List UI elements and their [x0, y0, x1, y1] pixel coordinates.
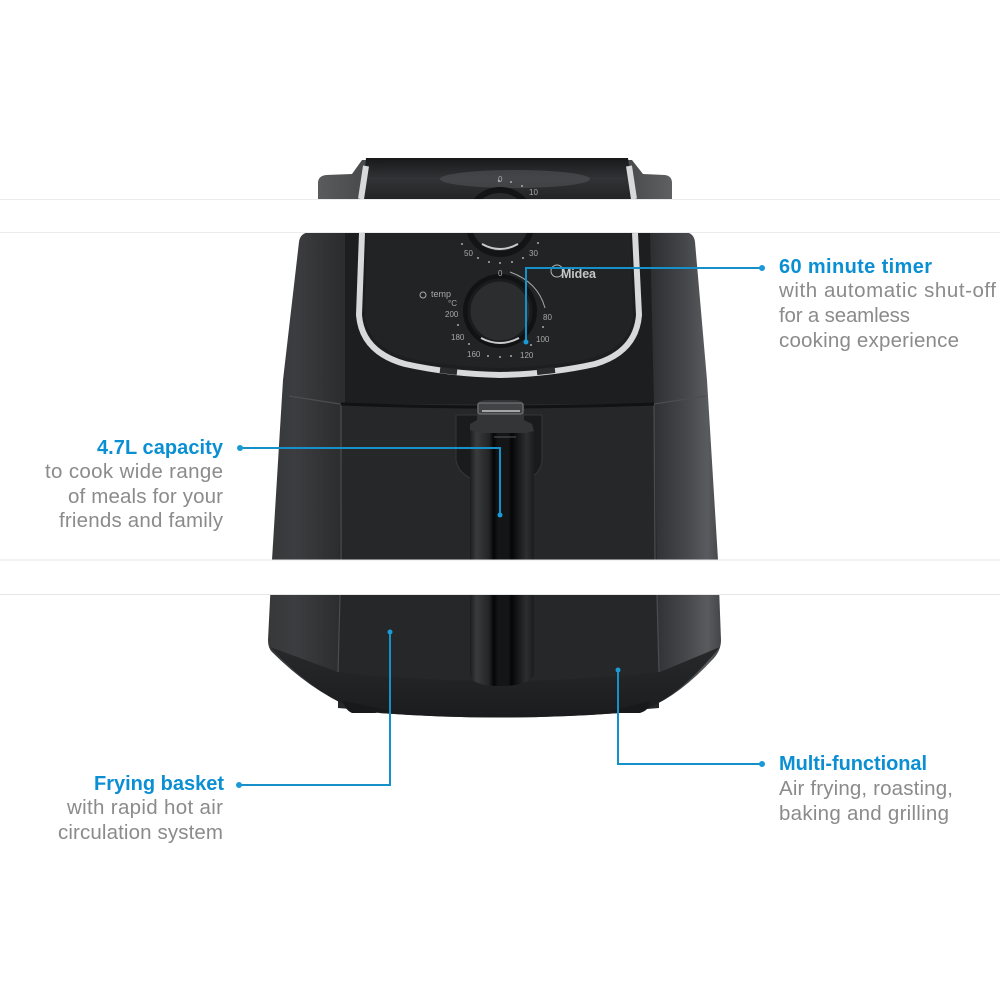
Midea logo: Midea — [561, 267, 597, 281]
control panel — [365, 233, 633, 368]
temperature dial: 100 — [536, 335, 550, 344]
leader line: frying basket — [236, 630, 392, 788]
callout: Multi-functional: Multi-functional — [779, 753, 927, 775]
leader line: capacity — [237, 445, 502, 518]
temperature dial: 120 — [520, 351, 534, 360]
callout: 60 minute timer — [778, 256, 996, 352]
callout: Frying basket: Frying basket — [94, 773, 224, 795]
temperature dial: 200 — [445, 310, 459, 319]
lid top — [362, 158, 634, 199]
white band: lower — [0, 560, 1000, 595]
timer dial: 50 — [464, 249, 473, 258]
temperature dial: temp — [431, 289, 451, 299]
timer dial: 0 — [498, 175, 503, 184]
callout: Multi-functional: Air frying, roasting, — [779, 777, 953, 800]
callout: Multi-functional — [779, 753, 953, 825]
handle — [456, 400, 542, 686]
callout: 4.7L capacity: 4.7L capacity — [97, 437, 224, 459]
temperature dial: 160 — [467, 350, 481, 359]
base foot shade — [270, 647, 720, 718]
silver trim — [359, 166, 639, 375]
callout: 4.7L capacity — [45, 437, 224, 532]
temperature dial: 0 — [498, 269, 503, 278]
callout: Frying basket: circulation system — [58, 821, 223, 844]
lid highlight — [440, 170, 590, 188]
timer dial — [461, 175, 539, 264]
leader line: multi-functional — [616, 668, 765, 767]
dark seam under panel — [341, 404, 654, 407]
callout: 60 minute timer: for a seamless — [779, 304, 910, 327]
timer dial: 10 — [529, 188, 538, 197]
feet — [343, 701, 650, 713]
side shelf of lid — [318, 160, 672, 205]
upper dark front — [345, 233, 654, 404]
callout: Frying basket — [58, 773, 224, 844]
front centre shade — [338, 404, 659, 715]
timer dial: 30 — [529, 249, 538, 258]
temperature dial: 180 — [451, 333, 465, 342]
callout: Frying basket: with rapid hot air — [66, 796, 223, 819]
basket seams — [289, 396, 706, 672]
callout: 60 minute timer: with automatic shut-off — [778, 279, 996, 302]
body silhouette — [268, 232, 721, 718]
callout: Multi-functional: baking and grilling — [779, 802, 949, 825]
callout: 60 minute timer: cooking experience — [779, 329, 959, 352]
callout: 60 minute timer: 60 minute timer — [779, 256, 932, 278]
air fryer product photo — [268, 158, 721, 718]
callout: 4.7L capacity: friends and family — [59, 509, 224, 532]
temperature dial: °C — [448, 299, 457, 308]
temperature dial: 80 — [543, 313, 552, 322]
temperature dial — [420, 269, 552, 360]
callout: 4.7L capacity: of meals for your — [68, 485, 223, 508]
callout: 4.7L capacity: to cook wide range — [45, 460, 223, 483]
trim dark accents — [440, 370, 555, 372]
white band: upper — [0, 199, 1000, 233]
Midea logo — [551, 265, 597, 281]
leader line: timer — [524, 265, 765, 344]
